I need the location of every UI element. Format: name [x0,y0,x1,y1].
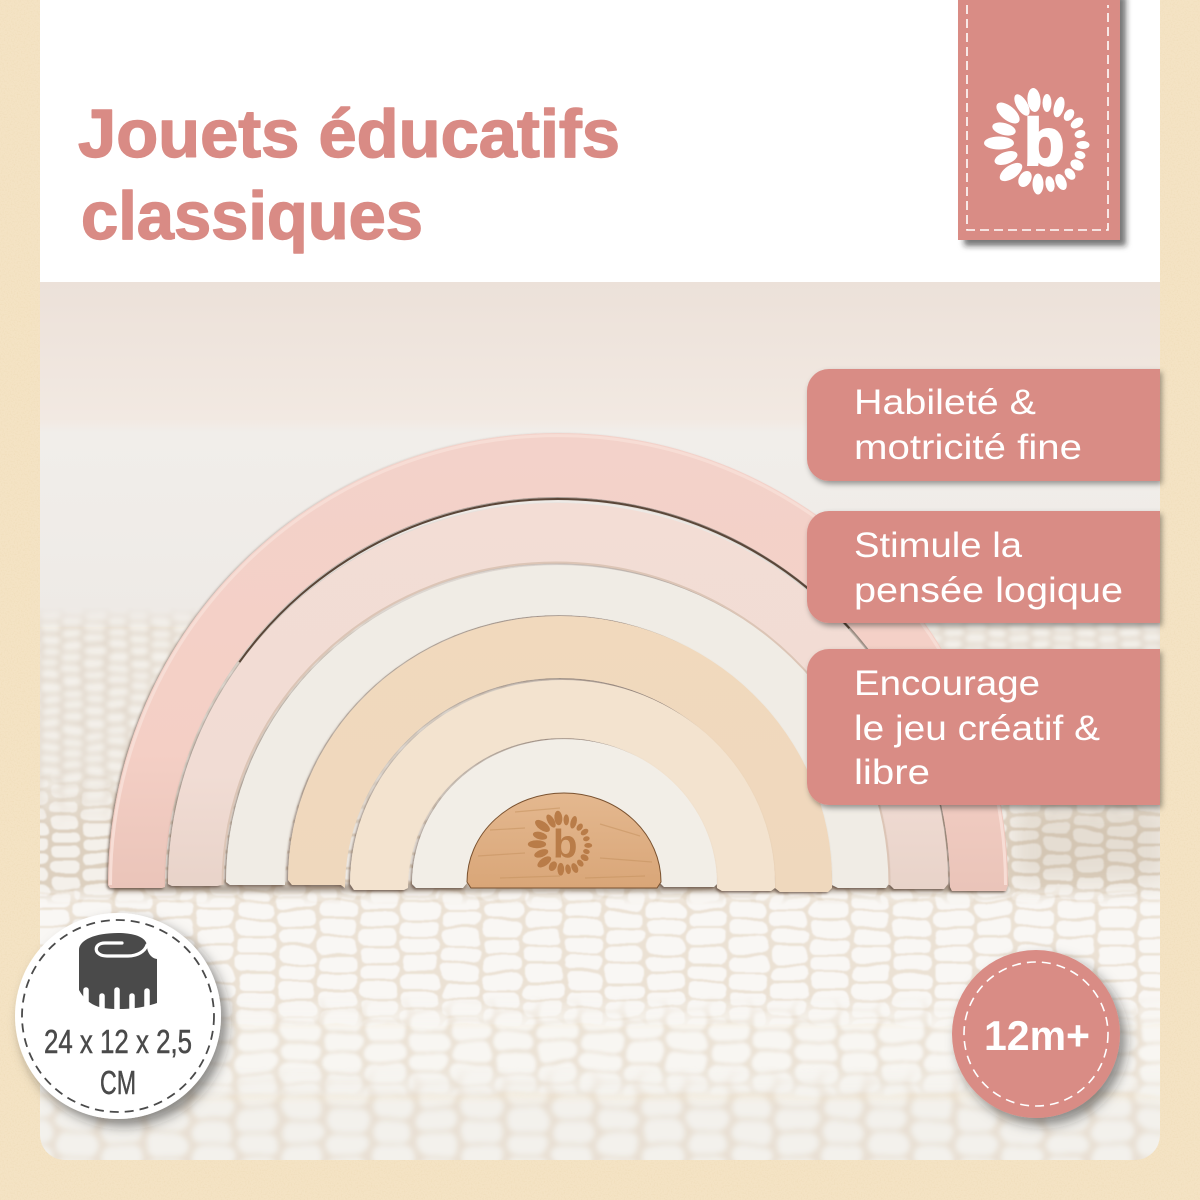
panel: product photo [10,282,1190,1180]
title: classiques [81,178,423,254]
arch 2: blush [168,503,948,889]
logo: sun flower b [984,87,1090,194]
callout: logical thinking [807,511,1160,623]
badge: age 12m+ [952,950,1120,1118]
rainbow stacking toy [108,433,1008,892]
icon: tape measure roll [79,933,157,1014]
tag with logo [958,0,1120,240]
logo: sun flower b: b [1024,105,1064,179]
woven rug [40,617,1160,1160]
stitching [967,5,1108,230]
arch 4: sand [288,616,832,892]
shadow under rainbow [112,884,1007,892]
dimensions text [44,1023,192,1101]
engraved logo [528,810,592,876]
arch 1: pink [108,433,1008,891]
callout: creative play: le jeu créatif & [854,709,1100,748]
white header panel [40,0,1160,282]
engraved logo: b [553,822,577,867]
wall backdrop [40,282,1160,627]
badge: dimensions [15,913,221,1119]
badge: age 12m+: 12m+ [984,1012,1090,1059]
arch 5: cream [350,680,775,891]
callout: logical thinking: pensée logique [854,571,1123,610]
callout: dexterity: motricité fine [854,428,1082,467]
wooden half disc [467,793,661,888]
callout: dexterity: Habileté & [854,383,1036,422]
dimensions text: 24 x 12 x 2,5 [44,1023,192,1060]
callout: creative play [807,649,1160,805]
arch 3: off-white [226,565,890,888]
title [78,96,620,254]
callout: dexterity [807,369,1160,481]
title: Jouets éducatifs [78,96,620,172]
callout: creative play: libre [854,753,930,792]
callout: creative play: Encourage [854,664,1040,703]
callout: logical thinking: Stimule la [854,526,1023,565]
arch 6: white [412,739,717,888]
dimensions text: CM [100,1064,136,1101]
